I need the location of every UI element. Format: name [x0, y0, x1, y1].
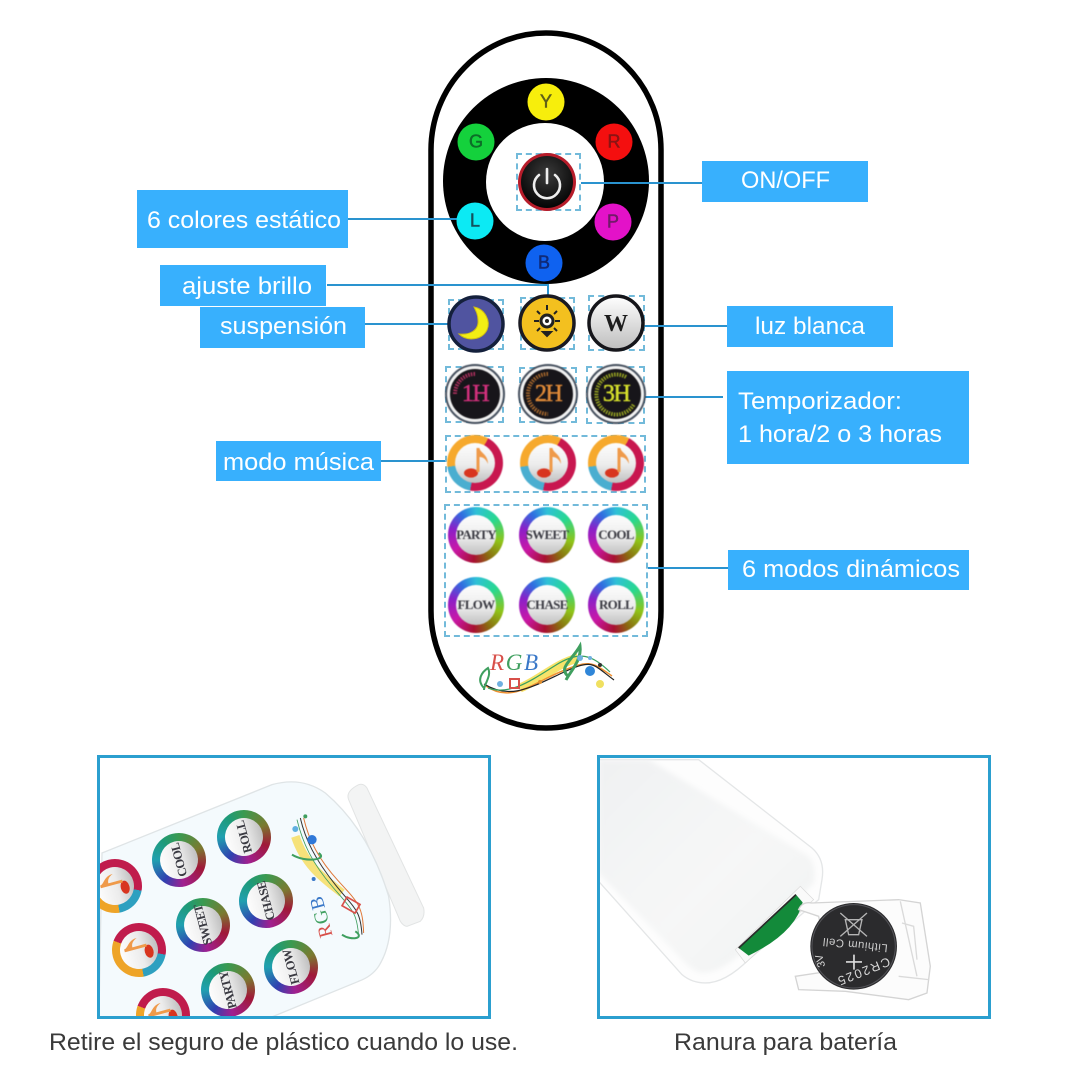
- ring: ROLL: ROLL: [233, 820, 255, 855]
- button: FLOW: FLOW: [458, 597, 494, 612]
- remote back and battery: 3V: [813, 952, 828, 969]
- remote back and battery: [600, 759, 931, 1000]
- ring: FLOW: [258, 934, 324, 1000]
- button: 1H: [447, 366, 503, 422]
- dynamic mode buttons: [447, 506, 645, 634]
- label: ON/OFF: [702, 161, 868, 202]
- connector: dynamic modes: [648, 567, 728, 569]
- ring: COOL: [146, 827, 212, 893]
- power button: [516, 153, 581, 211]
- button: 3H: [588, 366, 644, 422]
- ring: PARTY: [195, 957, 261, 1023]
- ring: COOL: COOL: [167, 842, 190, 878]
- connector: sleep: [365, 323, 449, 325]
- button: P: [594, 204, 632, 240]
- connector: white light: [645, 325, 727, 327]
- ring: music 2: [106, 917, 172, 983]
- label: ajuste brillo: ajuste brillo: [182, 273, 312, 300]
- label: modo música: modo música: [223, 449, 375, 476]
- button: music 2: [520, 435, 576, 491]
- button: COOL: COOL: [598, 527, 634, 542]
- label: Temporizador: 1 hora/2 o 3 horas: [738, 421, 942, 448]
- ring: PARTY: PARTY: [216, 970, 239, 1010]
- ring: FLOW: FLOW: [279, 948, 302, 986]
- button: music 1: [447, 435, 503, 491]
- caption: plastic tab: Retire el seguro de plástico cuando lo use.: [49, 1029, 518, 1056]
- dashed outlines: [444, 295, 648, 637]
- label: ajuste brillo: [160, 265, 326, 306]
- button: white light: [587, 294, 645, 352]
- button: ROLL: ROLL: [599, 597, 633, 612]
- ring: SWEET: SWEET: [190, 904, 215, 947]
- button: COOL: [588, 507, 644, 563]
- ring: ROLL: [211, 804, 277, 870]
- label: luz blanca: [727, 306, 893, 347]
- button: B: [526, 244, 562, 282]
- music mode buttons: [446, 434, 645, 492]
- panel: battery slot photo: [597, 755, 991, 1019]
- button: ROLL: [588, 577, 644, 633]
- remote front and tab: RGB: [306, 893, 337, 940]
- button: white light: W: [604, 311, 628, 337]
- button: P: P: [607, 212, 619, 232]
- button: L: [456, 202, 494, 240]
- ring: CHASE: CHASE: [254, 880, 277, 922]
- ring: CHASE: [233, 868, 299, 934]
- ring: SWEET: [170, 892, 236, 958]
- button: B: B: [538, 252, 550, 272]
- RGB music logo: [480, 646, 614, 693]
- button: R: [596, 124, 632, 160]
- label: suspensión: [200, 307, 365, 348]
- label: 6 colores estático: [137, 190, 348, 248]
- connector: on/off: [581, 182, 703, 184]
- button: CHASE: [519, 577, 575, 633]
- caption: battery slot: Ranura para batería: [674, 1029, 898, 1056]
- RGB music logo: RGB: [489, 650, 538, 675]
- label: modo música: [216, 441, 381, 481]
- label: luz blanca: luz blanca: [755, 313, 866, 340]
- button: SWEET: SWEET: [526, 527, 568, 542]
- connector: brightness: [327, 285, 548, 296]
- button: 2H: 2H: [535, 380, 561, 406]
- button: SWEET: [519, 507, 575, 563]
- timer buttons: [444, 363, 647, 425]
- label: Temporizador: [727, 371, 969, 464]
- connector: music mode: [381, 460, 446, 462]
- button: brightness: [518, 294, 576, 352]
- button: CHASE: CHASE: [526, 597, 568, 612]
- button: PARTY: PARTY: [456, 527, 496, 542]
- remote back and battery: Lithium Cell: [822, 935, 888, 954]
- ring: music 3: [130, 982, 196, 1048]
- button: L: L: [470, 210, 480, 230]
- button: R: R: [608, 132, 620, 152]
- remote front and tab: [100, 781, 424, 1016]
- label: Temporizador: Temporizador:: [738, 388, 902, 415]
- label: 6 colores estático: 6 colores estático: [147, 207, 341, 234]
- ring: music 1: [82, 853, 148, 919]
- color wheel: [443, 78, 649, 284]
- button: 2H: [520, 366, 576, 422]
- color buttons: [456, 84, 632, 282]
- connector: static colors: [348, 218, 459, 220]
- label: 6 modos dinámicos: [728, 550, 969, 590]
- button: Y: Y: [540, 92, 552, 112]
- label: ON/OFF: ON/OFF: [741, 167, 830, 194]
- remote outline: [431, 33, 661, 728]
- button: PARTY: [448, 507, 504, 563]
- button: G: G: [469, 132, 483, 152]
- button: 3H: 3H: [603, 380, 629, 406]
- label: 6 modos dinámicos: 6 modos dinámicos: [742, 556, 960, 583]
- connector: timer: [645, 396, 723, 398]
- button: FLOW: [448, 577, 504, 633]
- button: music 3: [588, 435, 644, 491]
- button: Y: [528, 84, 564, 120]
- label: suspensión: suspensión: [220, 313, 347, 340]
- button: 1H: 1H: [462, 380, 488, 406]
- remote back and battery: CR2025: [836, 954, 892, 988]
- button: moon: [447, 295, 505, 353]
- button: G: [458, 124, 494, 160]
- panel: plastic tab photo: [97, 755, 491, 1019]
